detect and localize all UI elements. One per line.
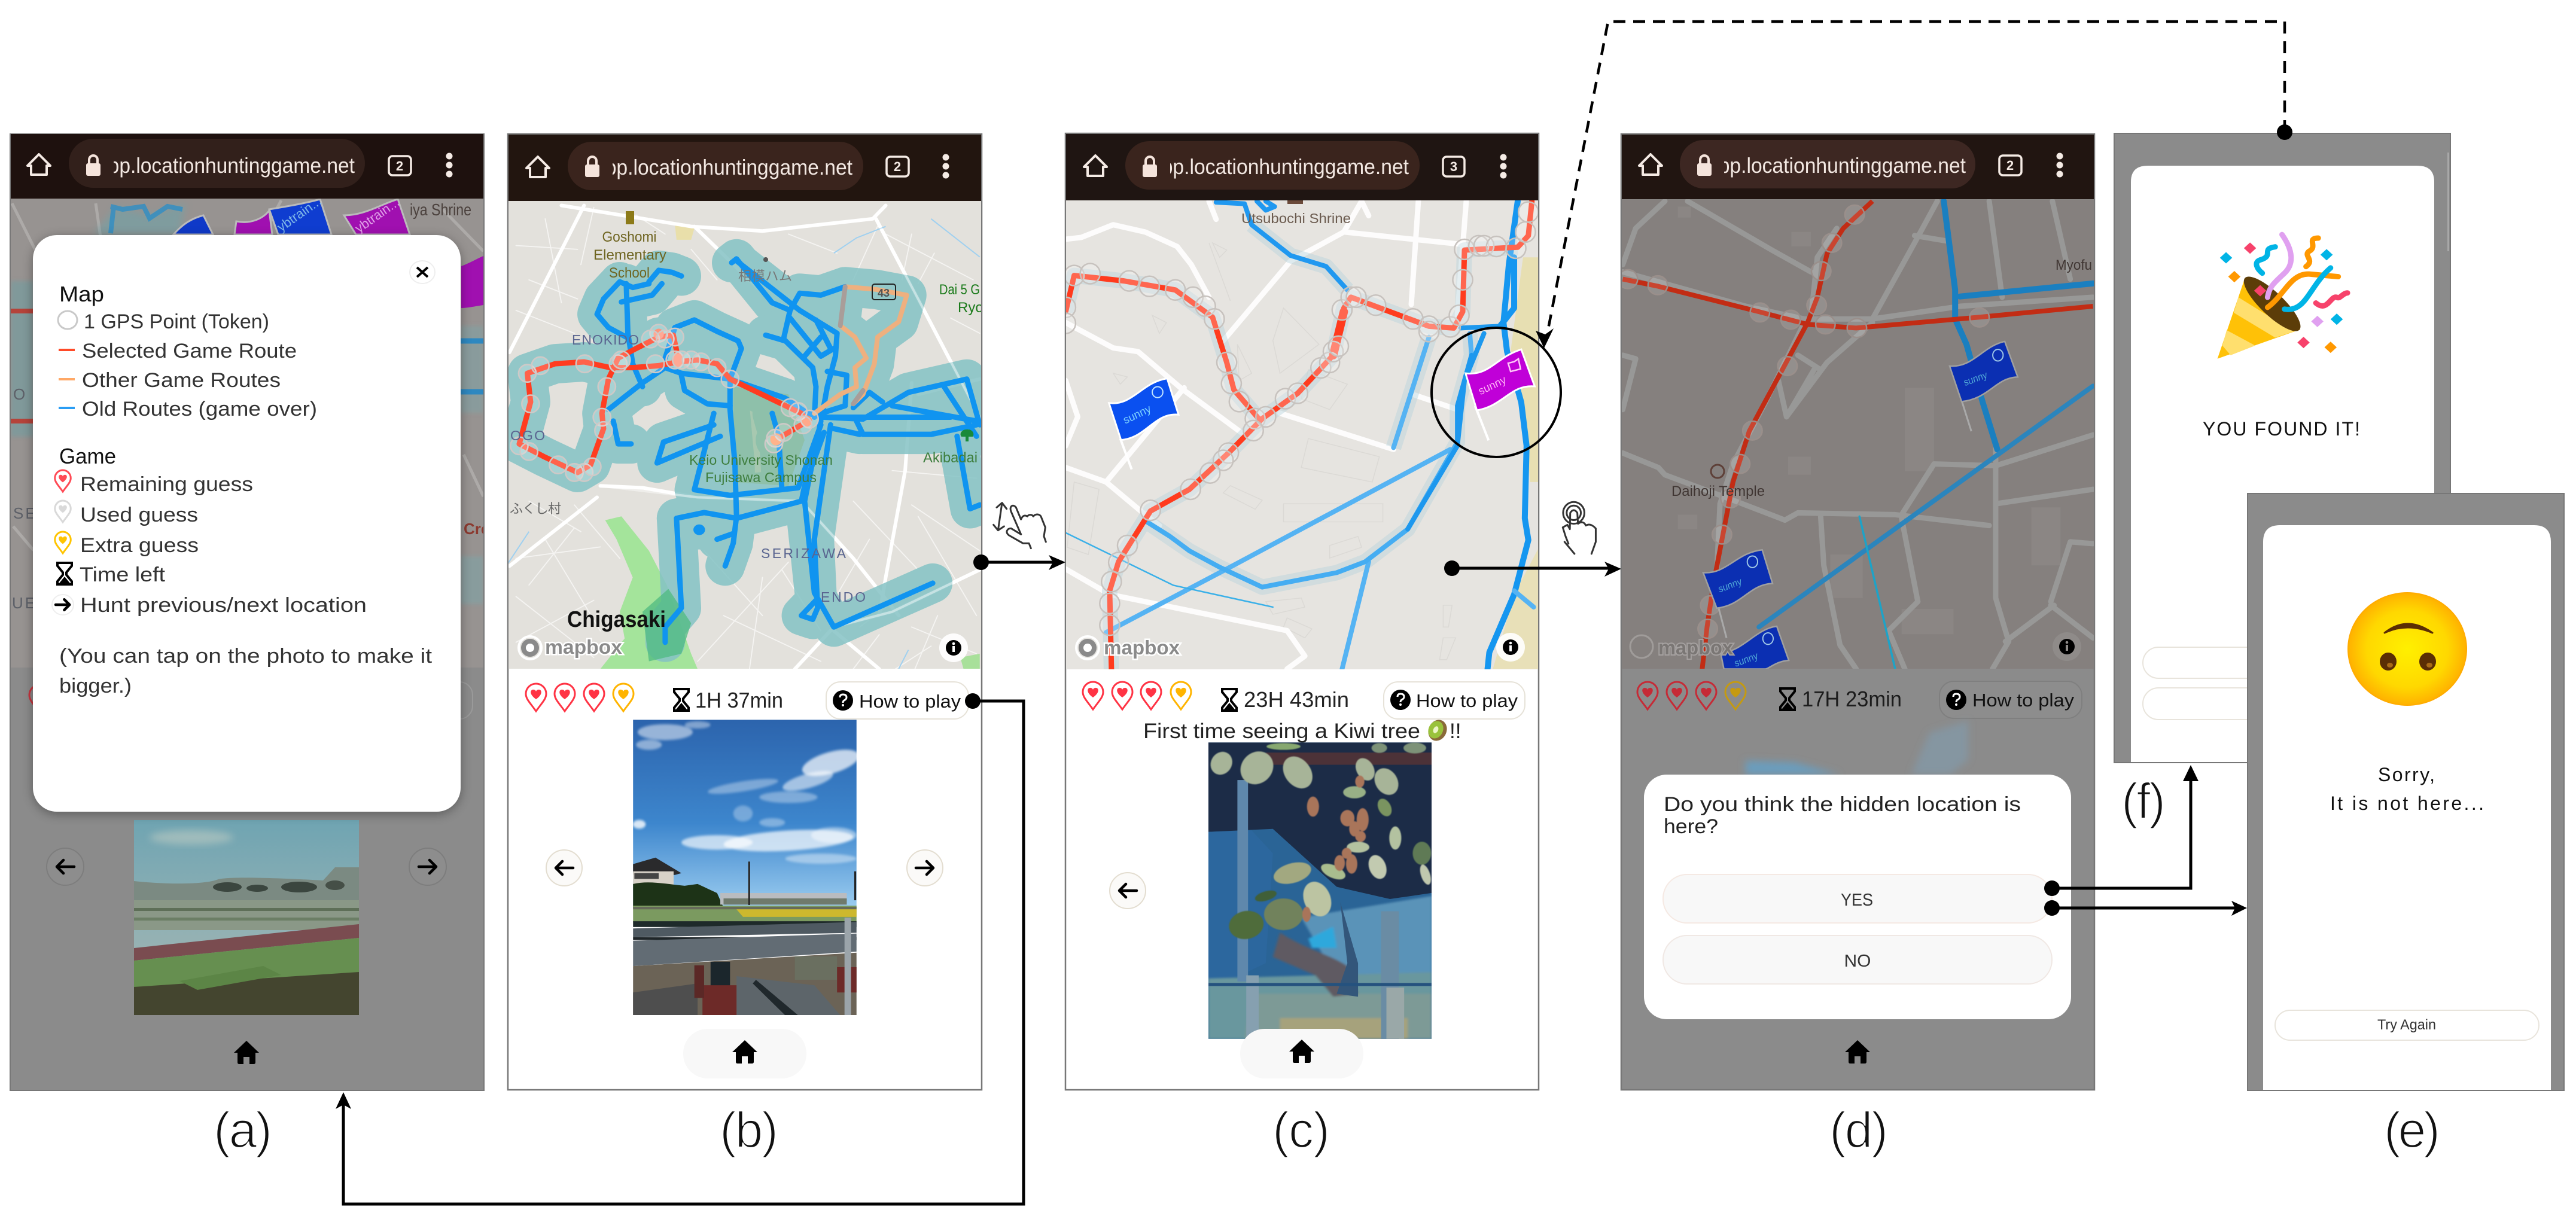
label (d): (d)	[1829, 1102, 1888, 1158]
map labels: Keio University Shonan	[689, 452, 833, 468]
map labels: mapbox	[1658, 636, 1734, 659]
selected route red	[1065, 201, 1532, 669]
panel c: zoomed map with flag	[1056, 133, 1539, 1090]
other routes orange	[814, 287, 907, 413]
map labels: ふくし村	[510, 501, 561, 516]
browser bar: 2	[894, 159, 901, 174]
panel a: how to play legend screen	[10, 134, 489, 1090]
found message: YOU FOUND IT!	[2203, 418, 2360, 440]
browser bar: app.locationhuntinggame.net	[1150, 154, 1409, 179]
blue flag middle	[1703, 550, 1773, 638]
close button	[410, 261, 435, 284]
legend: map section: Old Routes (game over)	[82, 398, 317, 420]
browser bar: 2	[396, 159, 403, 173]
dimmed map background	[11, 193, 489, 668]
map labels	[1076, 200, 1525, 662]
arrow: swipe map b to c	[973, 554, 1065, 570]
arrow: yes to found it	[2044, 765, 2199, 896]
legend: map section: 1 GPS Point (Token)	[84, 310, 269, 333]
map labels: Daihoji Temple	[1671, 483, 1765, 499]
icon: home	[234, 1041, 259, 1064]
map labels: 43	[878, 287, 890, 299]
browser bar: app.locationhuntinggame.net	[1707, 153, 1966, 178]
dimmed map background: SE	[13, 504, 38, 522]
question text: here?	[1664, 815, 1718, 838]
browser bar	[11, 134, 483, 199]
map labels: Utsubochi Shrine	[1241, 211, 1351, 226]
dimmed photo glimpse	[1746, 721, 1968, 775]
legend: map section	[58, 282, 317, 420]
icon: upside down smile	[2347, 592, 2467, 706]
map labels: 相模ハム	[738, 269, 792, 284]
dimmed map background: iya Shrine	[410, 200, 471, 219]
GPS token rings	[510, 324, 818, 482]
panel e: try again screen	[2248, 493, 2564, 1090]
photo: blue sky over farm	[633, 720, 861, 1015]
label (a): (a)	[214, 1102, 272, 1158]
dimmed map background: O	[13, 385, 25, 403]
selected route red	[1623, 201, 2093, 669]
GPS token rings	[1618, 205, 1989, 638]
how to play button: How to play	[859, 691, 961, 712]
time left: 17H 23min	[1802, 687, 1902, 711]
legend: map section: Selected Game Route	[82, 340, 297, 362]
try again button: Try Again	[2377, 1017, 2436, 1033]
map labels: Chigasaki	[567, 607, 666, 632]
arrow: tap map c to d	[1444, 560, 1621, 577]
legend: game section: Hunt previous/next location	[80, 594, 367, 617]
map labels	[510, 211, 983, 662]
label (f): (f)	[2121, 773, 2166, 829]
how to play button: How to play	[1972, 690, 2075, 711]
browser bar: 2	[2006, 158, 2014, 173]
guess pins	[526, 684, 634, 711]
blue flag middle: sunny	[1717, 576, 1743, 595]
icon: swipe hand	[994, 503, 1046, 548]
confirmation modal	[1644, 775, 2071, 1019]
photo caption	[1143, 717, 1461, 744]
blue flag: sunny	[1121, 402, 1153, 426]
browser bar	[508, 135, 981, 201]
map labels: Myofu	[2056, 257, 2092, 273]
panel d: guess confirmation screen	[1618, 134, 2096, 1090]
map with route halos	[506, 200, 983, 673]
legend: game section: Remaining guess	[80, 473, 253, 496]
guess pins	[1637, 682, 1746, 709]
browser bar: app.locationhuntinggame.net	[97, 153, 355, 178]
map labels: Fujisawa Campus	[705, 470, 817, 485]
blue flag lower	[1721, 626, 1789, 669]
question text: Do you think the hidden location is	[1664, 793, 2021, 816]
selected route red	[519, 335, 808, 473]
photo caption: First time seeing a Kiwi tree	[1143, 720, 1420, 743]
browser bar	[1066, 134, 1538, 200]
home button	[683, 1029, 806, 1078]
sorry message: It is not here...	[2330, 793, 2484, 814]
blue flag upper: sunny	[1962, 369, 1989, 388]
arrow: yes to try again	[2044, 900, 2247, 916]
blue flag upper	[1950, 342, 2018, 431]
how to play button	[826, 682, 969, 719]
circle highlight on flag	[1432, 328, 1561, 457]
photo hint text: (You can tap on the photo to make it	[59, 645, 433, 668]
YES button: YES	[1841, 891, 1873, 910]
previous and next arrow buttons	[546, 850, 943, 886]
map labels: Elementary	[593, 247, 666, 263]
old routes blue	[597, 259, 980, 642]
question text	[1664, 793, 2021, 838]
how to play button	[1939, 681, 2082, 718]
icon: home	[1845, 1040, 1870, 1064]
legend: game section: Time left	[80, 563, 166, 586]
map labels: Dai 5 G	[939, 282, 980, 298]
time left: 1H 37min	[695, 688, 783, 712]
map labels: OGO	[510, 428, 545, 443]
label (c): (c)	[1272, 1102, 1330, 1158]
browser bar	[1622, 135, 2094, 199]
photo: lettuce field	[134, 820, 359, 1015]
map labels: ENDO	[821, 589, 866, 605]
browser bar: 3	[1450, 159, 1457, 174]
how to play button: How to play	[1416, 690, 1518, 711]
try again button	[2275, 1010, 2539, 1040]
legend: game section: Extra guess	[80, 534, 199, 557]
label (b): (b)	[720, 1102, 778, 1158]
panel f: found it screen	[2114, 133, 2450, 763]
map labels: mapbox	[545, 636, 623, 658]
sorry message: Sorry,	[2378, 764, 2435, 785]
YES button	[1663, 874, 2052, 923]
map labels: School	[609, 265, 650, 281]
label (e): (e)	[2384, 1102, 2440, 1158]
purple selected flag	[1466, 349, 1534, 440]
icon: tap hand	[1563, 502, 1595, 554]
zoomed map	[1056, 199, 1539, 671]
icon: party popper	[2218, 234, 2347, 359]
map labels: SERIZAWA	[761, 546, 847, 561]
photo: kiwi tree	[1208, 742, 1433, 1040]
legend: map section: Other Game Routes	[82, 369, 281, 392]
dimmed guess pins and button	[29, 682, 473, 719]
sorry message	[2330, 764, 2484, 814]
dashed arrow: success flag back to map flag	[1536, 22, 2292, 348]
blue flag lower: sunny	[1733, 650, 1759, 669]
NO button: NO	[1844, 952, 1871, 971]
dimmed map background: ybtrain...	[275, 193, 324, 234]
legend: game section: Used guess	[80, 504, 198, 526]
map labels: Akibadai	[923, 450, 978, 466]
arrow: how to play to panel a	[336, 693, 1024, 1204]
dimmed map background: UE	[12, 594, 37, 612]
map labels: Ryo	[958, 300, 983, 316]
legend: game section	[52, 444, 367, 617]
purple selected flag: sunny	[1476, 373, 1508, 397]
home button	[1240, 1029, 1363, 1078]
old routes blue	[1759, 201, 2093, 669]
map labels	[1630, 257, 2092, 661]
empty buttons	[2143, 647, 2298, 720]
panel b: map overview screen	[506, 134, 983, 1090]
time left: 23H 43min	[1244, 687, 1349, 712]
legend: game section: Game	[59, 444, 116, 468]
dimmed map	[1618, 199, 2096, 671]
previous and next arrow buttons	[47, 848, 446, 885]
old routes blue	[1065, 201, 1534, 669]
guess pins	[1083, 682, 1191, 709]
dimmed map background: ybtrain...	[352, 194, 402, 236]
photo caption: !!	[1450, 720, 1461, 743]
GPS token rings	[1056, 202, 1538, 635]
map labels: Goshomi	[602, 229, 657, 245]
blue flag	[1109, 379, 1179, 470]
map labels: ENOKIDO	[572, 332, 639, 348]
how to play button	[1384, 682, 1525, 719]
map labels: mapbox	[1104, 636, 1180, 659]
browser bar: app.locationhuntinggame.net	[594, 155, 852, 179]
photo hint text: bigger.)	[59, 675, 132, 697]
legend modal	[33, 235, 461, 812]
previous arrow button	[1110, 873, 1146, 909]
photo hint text	[59, 645, 433, 697]
NO button	[1663, 935, 2052, 984]
dimmed map background: Cre	[464, 520, 489, 538]
legend: map section: Map	[59, 282, 104, 306]
